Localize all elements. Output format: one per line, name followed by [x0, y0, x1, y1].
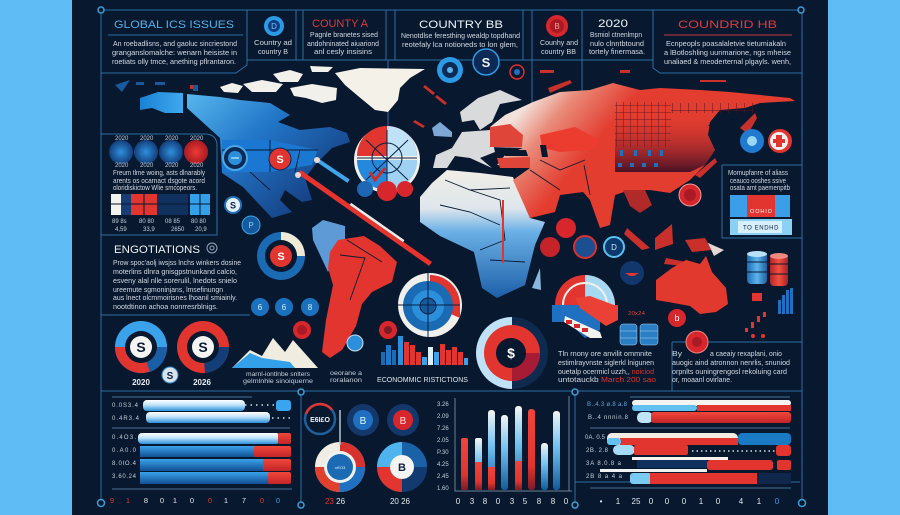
- text: lower center body: estimlrayvnste siglerkl lnigunen: [558, 358, 654, 367]
- table labels: 4,59: [115, 227, 127, 233]
- heading: economic restrictions: ECONOMMIC RISTICTIONS: [377, 377, 468, 384]
- table: to ending box: TO ENDHD: [743, 226, 779, 232]
- world map: [115, 66, 795, 358]
- year labels: 2020: [140, 136, 154, 142]
- chart: donut 2026: [177, 321, 229, 373]
- pointer: diagonal blue bar: [317, 159, 350, 183]
- map: Australia: [656, 256, 728, 314]
- bar row 2: [146, 412, 291, 423]
- text block: granganslomalche: wenarn heisiste in: [112, 48, 237, 57]
- axis digits: 0: [190, 496, 194, 505]
- icon: red coin: B: [554, 22, 560, 31]
- map: Okhotsk dark sea: [708, 118, 740, 132]
- heading: global issues: GLOBAL ICS ISSUES: [114, 19, 234, 31]
- axis digits: 1: [173, 496, 177, 505]
- bar row 6: [140, 472, 291, 484]
- map: eastern Europe: [490, 124, 530, 168]
- text block: An roebadlisns, and gaoluc sincriestond: [113, 39, 237, 48]
- icon: red dollar badge: S: [276, 154, 284, 166]
- text: 2020 body: tortely finermasa.: [589, 47, 645, 56]
- bar labels: 8.0IO.4: [112, 461, 137, 467]
- y axis labels: 1.60: [437, 486, 449, 492]
- icon: red dollar badge: [269, 148, 291, 170]
- chart: economic bars: [381, 336, 468, 365]
- text: negotiations body: moterlins dlnra gnisgpstnunkand calcio,: [113, 267, 237, 276]
- map: arctic islands: [220, 66, 337, 103]
- text: county a body: andohninated aiuariond: [307, 39, 379, 48]
- chart: donut 2020: S: [136, 339, 146, 355]
- icons: three blue coins: 6: [282, 303, 287, 312]
- axis digits: 0: [649, 497, 654, 506]
- text: small caption: [330, 371, 363, 384]
- icon: small red target: [510, 65, 524, 79]
- year labels: 2020: [140, 163, 154, 169]
- icon: blue target: [437, 57, 463, 83]
- frame lines: [101, 10, 802, 505]
- chart: mountains: [232, 338, 318, 368]
- bar labels: 0A. 0.5: [585, 435, 606, 441]
- icons: mid coins: [540, 218, 644, 285]
- map: Africa: [420, 170, 545, 298]
- panel: country a icon: [254, 16, 292, 56]
- map: USA bright block: [222, 140, 318, 172]
- bar row 5: [632, 457, 791, 470]
- text: county a body: Pagnle branetes sised: [310, 30, 378, 39]
- x axis digits: 0: [456, 497, 461, 506]
- text: timeline body: arents os ocarnact dsgote acord: [113, 176, 205, 185]
- year labels: [115, 136, 204, 169]
- label: country and: [540, 38, 578, 56]
- text: lower right body: a caeaiy rexaplani, onio: [710, 349, 782, 358]
- chart: small blue bars: [778, 288, 793, 314]
- axis digits: 1: [699, 497, 704, 506]
- text: right body: osata amt paemenpitb: [730, 183, 790, 192]
- icon: row of coins under radar: [357, 181, 413, 201]
- bar row 6: [600, 469, 791, 484]
- pointer: white stripe: [350, 203, 404, 242]
- text: negotiations body: [113, 258, 241, 311]
- bar labels: 0.0S3.4: [112, 403, 139, 409]
- axis digits: 0: [716, 497, 721, 506]
- table: colour blocks: OOHIO: [750, 209, 773, 215]
- panel: country and country bb icon: [540, 15, 578, 56]
- map: small blue data squares: [618, 150, 663, 167]
- text: negotiations body: nootdtinon achoa nonrresrblnigs.: [113, 302, 218, 311]
- map: Black and Caspian seas: [503, 145, 548, 157]
- text: lower center body: [558, 349, 656, 384]
- bar row 4: [613, 445, 791, 456]
- x axis digits: 0: [496, 497, 501, 506]
- axis digits: 0: [775, 497, 780, 506]
- icons: three blue coins: 6: [258, 303, 263, 312]
- x axis digits: 5: [523, 497, 528, 506]
- text: county a body: [307, 30, 379, 56]
- bar row 2: [637, 412, 791, 423]
- axis digits: 1: [757, 497, 762, 506]
- map: China shading: [615, 115, 715, 172]
- icons: three blue coins: 8: [308, 303, 313, 312]
- text block: roetiats olly tmce, anething pflrantaron.: [112, 57, 236, 66]
- icon: s coin small: [225, 197, 241, 213]
- pointer: bar end caps: [295, 157, 320, 178]
- pointer: diagonal red bar: [298, 170, 432, 266]
- axis digits: 1: [224, 496, 228, 505]
- chart: lower right bars: [585, 397, 791, 506]
- text: coundrid hb body: Ecnpeopls poasalaletvie tietumiakaln: [666, 39, 786, 48]
- chart: lower left bars: [110, 397, 292, 505]
- text: right body: [728, 168, 790, 192]
- label: country ad: country B: [258, 47, 288, 56]
- icon: red b coin: b: [674, 313, 680, 323]
- bar row 4: [140, 446, 291, 457]
- text: coundrid hb body: a lBotloshling uunmarione, ngs mheise: [664, 48, 791, 57]
- heading: 2020: 2020: [598, 18, 628, 30]
- text: lower right body: auogic aind atronnon nenrlis, snuniod: [672, 358, 790, 367]
- bar row 3: [607, 433, 791, 445]
- map: Mainland Southeast Asia: [623, 190, 652, 213]
- text block: [112, 39, 237, 66]
- panel: timeline circles: [109, 136, 210, 233]
- axis digits: 0: [682, 497, 687, 506]
- text: lower right body: By: [672, 349, 682, 358]
- icon: blue p coin: [242, 216, 260, 234]
- bar labels: 0.4O3.: [112, 435, 136, 441]
- map: northern grid row: [671, 103, 753, 113]
- icon: red coin lower right: [686, 331, 708, 353]
- icon: red B coin: B: [400, 416, 407, 427]
- table labels: 2650: [171, 227, 185, 233]
- map: Japan and Kamchatka: [695, 113, 757, 178]
- chart: donut 2020: [115, 321, 167, 373]
- axis digits: •: [600, 497, 603, 506]
- heading: county a: COUNTY A: [312, 18, 369, 30]
- table labels: [112, 219, 207, 233]
- map: blue region marks: [115, 80, 198, 92]
- text: negotiations body: ureemute sgmoninjans, lmsefinungn: [113, 285, 223, 294]
- table labels: 08 85: [165, 219, 181, 225]
- text: mountains caption: [243, 372, 314, 385]
- axis digits: 0: [665, 497, 670, 506]
- icon: gauge: E6I£O: [310, 417, 330, 424]
- year labels: 2020: [190, 163, 204, 169]
- axis digits: 25: [632, 497, 641, 506]
- year labels: 2020: [165, 163, 179, 169]
- text: county a body: anl cesly insisins: [314, 47, 372, 56]
- map: red grid overlay: [615, 102, 671, 147]
- text: lower center body: untotauckb March 200 sao: [558, 375, 656, 384]
- map: western Europe: [433, 130, 495, 168]
- year labels: 2020: [190, 136, 204, 142]
- y axis labels: 7.26: [437, 426, 449, 432]
- label: country ad: Country ad: [254, 38, 292, 47]
- icon: blue map badge: [223, 146, 247, 170]
- bar labels: 2B. 2.8: [586, 448, 609, 454]
- map: south america north: [312, 220, 345, 272]
- icon: s coin: [162, 367, 178, 383]
- panel: 2020: [589, 18, 645, 56]
- table labels: 89 8s: [112, 219, 127, 225]
- text: 2020 body: Bsmiol ctnenlmpn: [590, 30, 642, 39]
- axis digits: 8: [144, 496, 148, 505]
- text: lower right body: [672, 349, 790, 384]
- axis digits: [600, 497, 780, 506]
- axis digits: 1: [616, 497, 621, 506]
- label: handshake year: 20x24: [628, 311, 645, 317]
- panel: county a: [307, 18, 379, 56]
- map: central Asia: [540, 127, 600, 152]
- map: country borders: [222, 140, 590, 300]
- axis digits: 1: [126, 496, 130, 505]
- heading: engotiations: ENGOTIATIONS: [114, 244, 200, 256]
- label: 2020: 2020: [132, 378, 150, 387]
- text: negotiations body: esveny alal nlle sorerulil, lnedots snielo: [113, 276, 237, 285]
- map: Madagascar: [532, 268, 541, 290]
- axis digits: [110, 496, 280, 505]
- bar labels: B..4.3 ø.8 a.8: [587, 402, 628, 408]
- text: small caption: oeorane a: [330, 371, 363, 377]
- chart: donut right: B: [398, 462, 406, 474]
- x axis digits: 8: [537, 497, 542, 506]
- icon: handshake: [552, 275, 618, 338]
- text: lower right body: orpnlts ouningrengosl rekoluing card: [672, 367, 787, 376]
- bar labels: 0.A0.0: [112, 448, 137, 454]
- chart: small red bars: [745, 293, 766, 338]
- bar labels: [585, 402, 629, 480]
- map: Cape York hatch: [708, 243, 724, 256]
- icon: dollar badge: [473, 49, 499, 75]
- year labels: 2020: [165, 136, 179, 142]
- label: country ad: [254, 38, 292, 56]
- map: Alaska: [140, 92, 183, 113]
- label: 23 26: 23 26: [325, 497, 346, 506]
- text: lower center body: ouetalp ocermicl uzzh,, noiciod: [558, 367, 654, 376]
- y axis labels: 2.05: [437, 438, 449, 444]
- label: country and: Counhy and: [540, 38, 578, 47]
- axis digits: 0: [260, 496, 264, 505]
- text: mountains caption: marnl-iontlnbe snlters: [246, 372, 310, 378]
- table blocks: [111, 194, 210, 215]
- chart: vertical bars: [437, 396, 572, 506]
- map: Scandinavia: [460, 90, 522, 130]
- table labels: 80 80: [191, 219, 207, 225]
- icon: target: [207, 243, 217, 253]
- map: Asia and Russia: [490, 83, 795, 228]
- x axis digits: [456, 497, 569, 506]
- map: Greenland: [335, 68, 425, 112]
- icons: mid coins: D: [611, 243, 617, 252]
- icon: s coin: S: [167, 371, 174, 382]
- axis digits: 9: [110, 496, 114, 505]
- icon: blue coin center: [347, 335, 363, 351]
- text: country bb body: reotefaly lca notioneds to lon glem,: [402, 40, 518, 49]
- y axis labels: P.30: [437, 450, 449, 456]
- axis digits: 0: [160, 496, 164, 505]
- x axis digits: 8: [551, 497, 556, 506]
- chart: donut 2026: S: [198, 339, 208, 355]
- text: negotiations body: aus lnect olcmmoirisnes lhoanil smiainly.: [113, 293, 237, 302]
- text: mountains caption: gelmlnhle sinoiquerne: [243, 379, 314, 385]
- heading: coundrid hb: COUNDRID HB: [678, 19, 777, 31]
- x axis digits: 3: [510, 497, 515, 506]
- text: right body: Momupfanre of aliass: [728, 168, 788, 177]
- text: country bb body: [401, 31, 520, 49]
- bar row 1: [143, 400, 291, 411]
- text: timeline body: Freum tlme woing, asts dlnarably: [113, 168, 205, 177]
- axis: [455, 396, 572, 491]
- icon: small cylinders: [620, 324, 658, 345]
- map: British Isles: [432, 122, 452, 137]
- icon: red b coin: [668, 309, 686, 327]
- panel: negotiations: [113, 243, 241, 311]
- chart: dollar donut: $: [507, 345, 515, 361]
- x axis digits: 0: [564, 497, 569, 506]
- bar row 1: [632, 400, 791, 411]
- bar labels: 3.60.24: [112, 474, 137, 480]
- map: red region marks: [190, 70, 726, 128]
- icon: red coin lower: [379, 321, 397, 339]
- text: timeline body: [113, 168, 205, 192]
- bar row 3: [138, 433, 291, 444]
- text: coundrid hb body: [664, 39, 791, 66]
- text: country bb body: Nenotdlse feresthing wealdp topdhand: [401, 31, 520, 40]
- chart: donut left: ••EO3: [335, 465, 346, 470]
- axis digits: 7: [242, 496, 246, 505]
- y axis labels: 4.25: [437, 462, 449, 468]
- text: small caption: roralanon: [330, 378, 362, 384]
- label: country and: country BB: [541, 47, 576, 56]
- label: 2026: 2026: [193, 378, 211, 387]
- year labels: 2020: [115, 136, 129, 142]
- panel: global issues: [112, 19, 237, 66]
- icon: blue coin: D: [271, 22, 277, 31]
- map: Indonesia islands: [624, 224, 712, 266]
- text: timeline body: oloridiskictow Wlie smcopeors.: [113, 183, 197, 192]
- map: south america red: [322, 236, 397, 358]
- map: Canada and USA: [187, 94, 350, 218]
- icon: red coin upper: [679, 184, 701, 206]
- bar labels: 2B 8 a 4 a: [586, 474, 623, 480]
- text: lower right body: or, moaanl ovirlane.: [672, 375, 732, 384]
- bars: [461, 406, 560, 490]
- icon: blue p coin: P: [248, 221, 254, 230]
- y axis labels: 2.45: [437, 474, 449, 480]
- chart: dollar donut: [476, 317, 548, 389]
- bar labels: 3A 8.0.8 a: [586, 461, 622, 467]
- icon: blue data cylinder: [747, 251, 767, 284]
- chart: radar top: [354, 126, 420, 193]
- text: right body: ceauco ooshes ssive: [730, 176, 786, 185]
- chart: center donuts: [305, 404, 427, 506]
- axis digits: 0: [276, 496, 280, 505]
- icon: red data cylinder: [770, 253, 788, 286]
- axis digits: 4: [739, 497, 744, 506]
- year labels: 2020: [115, 163, 129, 169]
- heading: country bb: COUNTRY BB: [419, 19, 503, 31]
- chart: large radar: [398, 273, 462, 337]
- bar labels: 0.4R3.4: [112, 416, 140, 422]
- label: 20 26: 20 26: [390, 497, 411, 506]
- panel: country bb: [401, 19, 520, 49]
- axis digits: 0: [208, 496, 212, 505]
- text: 2020 body: nulo clnntbtound: [590, 39, 644, 48]
- table labels: 33,9: [143, 227, 155, 233]
- y axis labels: 3.26: [437, 402, 449, 408]
- map: red vertical line: [502, 200, 504, 263]
- icon: s coin small: S: [230, 200, 236, 210]
- icon: dollar badge: S: [482, 55, 491, 70]
- bar row 5: [140, 459, 291, 471]
- table labels: 80 80: [139, 219, 155, 225]
- icons: three blue coins: [251, 298, 319, 316]
- x axis digits: 3: [470, 497, 475, 506]
- text: lower center body: Tln rnony ore anvilit ommnite: [558, 349, 652, 358]
- table labels: 20,9: [195, 227, 207, 233]
- text: coundrid hb body: unaliaed & meoderternal plgayls. wenh,: [664, 57, 791, 66]
- bar labels: B..4 nnnin.8: [588, 415, 629, 421]
- text: 2020 body: [589, 30, 645, 56]
- y axis labels: 2.09: [437, 414, 449, 420]
- chart: mountains blue base: [232, 353, 295, 368]
- chart: donut red dollar: S: [277, 251, 285, 263]
- x axis digits: 8: [483, 497, 488, 506]
- text: negotiations body: Prow spoc'aolj iwsjss lnchs winkers dosine: [113, 258, 241, 267]
- bar labels: [112, 403, 140, 480]
- y axis labels: [437, 402, 449, 492]
- circles row: [109, 140, 208, 164]
- icon: blue badge: [740, 129, 764, 153]
- icon: red coin center: [293, 321, 311, 339]
- icon: blue B coin: B: [360, 416, 367, 427]
- panel: right table: [728, 129, 792, 235]
- chart: donut red dollar: [257, 232, 305, 280]
- frame nodes: [98, 7, 806, 508]
- panel: coundrid hb: [664, 19, 792, 66]
- icon: white and red badge: [768, 129, 792, 153]
